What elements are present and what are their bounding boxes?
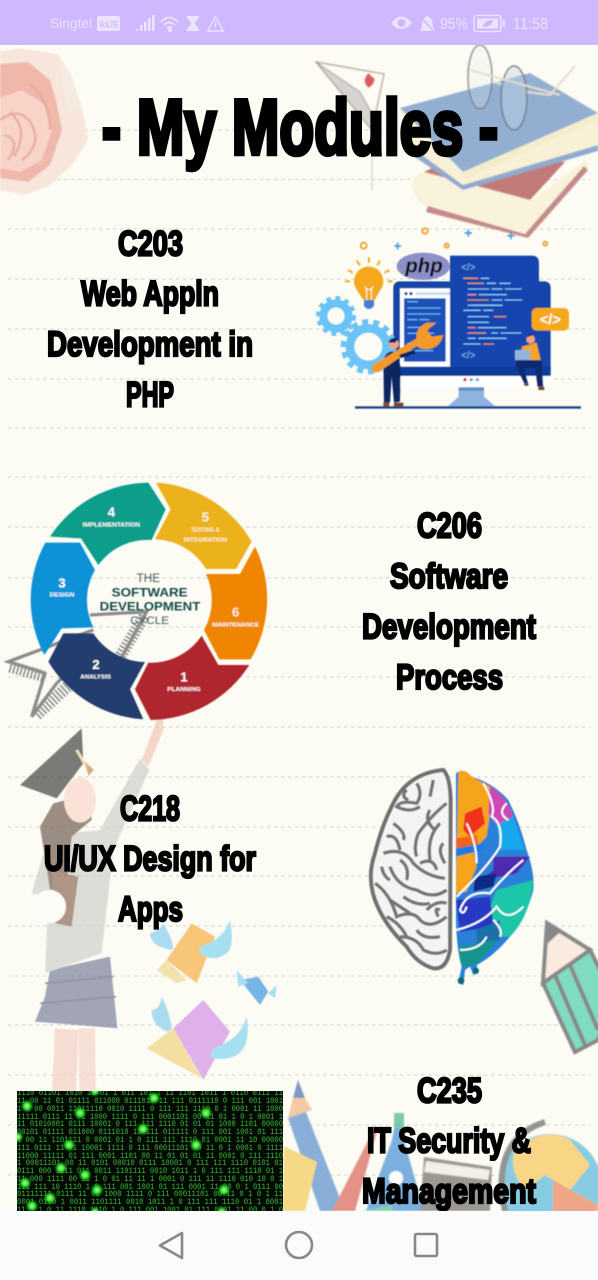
- segment 1 planning: [135, 636, 249, 720]
- heading: C218: Apps: [118, 890, 183, 929]
- icon: battery: [474, 16, 505, 32]
- decoration: sketched arrow behind cycle: [8, 612, 147, 717]
- heading: C203: PHP: [126, 376, 174, 414]
- segment labels: PLANNING: [167, 687, 201, 693]
- woman with laptop: [515, 334, 544, 390]
- heading: C235: IT Security &: [367, 1122, 531, 1160]
- image: green binary matrix: 1 0 00 0011 11011110 0010 1111 0 111 111 1110 0 1 0001 11 1000: [17, 1104, 283, 1114]
- cycle centre title: THE: [137, 572, 160, 585]
- cycle centre title: [100, 572, 201, 627]
- heading: C206: [362, 506, 536, 697]
- image: green binary matrix: 0001 0110 1 0011 1101111 0010 1011 1 0 111 111 1110 01 1 0001: [17, 1197, 283, 1207]
- battery percent: 95%: [440, 16, 468, 33]
- brain right hemisphere: [456, 771, 534, 985]
- segment labels: TESTING &: [191, 527, 220, 533]
- heading: C206: C206: [417, 506, 482, 546]
- editor window: [400, 288, 452, 367]
- brain left hemisphere: [371, 770, 451, 968]
- cycle centre title: DEVELOPMENT: [100, 600, 201, 614]
- segment 4 implementation: [50, 483, 166, 565]
- image: green binary matrix: 111 111 10 1110 1 0 111 001 1001 01 111 0001 11 00 0 1 0111 00: [17, 1182, 283, 1192]
- icon: home: [286, 1232, 312, 1258]
- cycle centre title: CYCLE: [130, 615, 169, 627]
- carrier name: Singtel: [50, 16, 92, 31]
- icon: hourglass: [187, 16, 199, 31]
- decoration: paper plane: [316, 62, 384, 190]
- icon: signal bars: [136, 15, 154, 31]
- sparkles: [361, 228, 547, 249]
- segment 2 analysis: [48, 633, 145, 719]
- segment labels: MAINTENANCE: [212, 623, 259, 629]
- man with wrench: [371, 323, 443, 407]
- clock: 11:58: [513, 16, 548, 33]
- heading: C235: C235: [417, 1072, 482, 1110]
- icon: eye: [391, 16, 412, 29]
- icon: VoLTE: [97, 16, 120, 31]
- segment 5 testing and integration: [155, 483, 252, 569]
- heading: C218: [44, 790, 256, 929]
- cycle centre title: SOFTWARE: [112, 586, 188, 600]
- heading: C206: Process: [396, 658, 503, 697]
- image: green binary matrix: 11111 0111 11 01 1000 1111 0 111 0001101 00 11 01 1 0 1 0001 1: [17, 1112, 283, 1122]
- image: green binary matrix: 0111 000 1111 011 0011 1101111 0010 1011 1 0 111 111 1110 01 1: [17, 1166, 283, 1176]
- image: green binary matrix: 11 01010001 0111 10001 0 111 111 1110 01 01 01 1000 1101 00000: [17, 1119, 283, 1129]
- image: green binary matrix: 01111111 0111 11 01 1000 1111 0 111 00011101 00 11 0 1 0 1 11: [17, 1189, 283, 1199]
- illustration: brain: [371, 770, 534, 985]
- image: green binary matrix: 11 000 1111 00 11 1 0 01 11 11 1 0001 0 111 11 1110 010 10 0 1: [17, 1174, 283, 1184]
- code panel: [450, 256, 539, 367]
- navigation bar: [0, 1211, 598, 1280]
- heading: C203: Development in: [47, 325, 253, 364]
- icon: recents: [415, 1234, 437, 1256]
- segment labels: INTEGRATION: [184, 537, 227, 543]
- monitor: [355, 281, 581, 409]
- image: green binary matrix: 1 00 11 1101111 0 0001 01 1 0 111 111 1110 01 0001 11 10 00000: [17, 1135, 283, 1145]
- gears: [319, 299, 393, 371]
- segment labels: ANALYSIS: [80, 674, 112, 680]
- code panel: </>: [461, 351, 476, 362]
- heading: C218: C218: [120, 790, 180, 828]
- icon: VoLTE: VoLTE: [99, 20, 118, 30]
- segment labels: 2: [92, 657, 100, 672]
- php logo: [397, 253, 450, 280]
- segment 3 design: [31, 543, 95, 655]
- icon: back: [160, 1233, 182, 1258]
- status bar: [0, 0, 598, 45]
- code bubble: [532, 308, 569, 331]
- image: green binary matrix: 11 1 1 0 11 1110 1110 1 0 111 001 1001 01 111 0001 11 00 0 1 0: [17, 1205, 283, 1215]
- image: green binary matrix: 11 00 11 01 01111 011000 0111010 11 111 0111110 0 111 001 1001: [17, 1096, 283, 1106]
- plus marks: [394, 229, 515, 249]
- heading: C235: Management: [362, 1172, 536, 1211]
- code bubble: </>: [540, 313, 561, 329]
- segment labels: [50, 505, 259, 693]
- heading: C206: Software: [390, 557, 508, 596]
- icon: muted bell: [420, 16, 435, 33]
- decoration: graduate girl: [20, 718, 164, 1091]
- segment labels: 6: [232, 604, 239, 619]
- heading: C218: UI/UX Design for: [44, 840, 256, 878]
- icon: warning: [208, 17, 224, 31]
- decoration: flying books: [147, 920, 277, 1080]
- segment 6 maintenance: [204, 547, 267, 659]
- segment labels: 4: [108, 505, 116, 520]
- decoration: stacked books and glasses: [400, 45, 598, 238]
- illustration: PHP web development: [319, 228, 581, 409]
- decoration: school supplies: [283, 1080, 598, 1211]
- segment labels: 5: [202, 510, 210, 525]
- light bulb: [345, 257, 393, 309]
- image: green binary matrix: [17, 1091, 283, 1211]
- decoration: rose: [0, 48, 88, 195]
- image: green binary matrix: 1 00011101 00 11 0101 00010 0111 10001 0 111 111 1110 0101 01: [17, 1158, 283, 1168]
- segment labels: 3: [58, 575, 66, 590]
- php logo: php: [404, 254, 443, 277]
- image: green binary matrix: 1110 01101 1010 11 01 1 011 101 1 11 1101 1011 1 0110 0111 11: [17, 1088, 283, 1098]
- segment labels: 1: [180, 670, 188, 685]
- chart: software development cycle: [31, 483, 267, 720]
- heading: C206: Development: [362, 608, 536, 646]
- heading: C203: [47, 224, 253, 414]
- code panel: </>: [461, 263, 476, 274]
- image: green binary matrix: 11000 11111 01 111 0001 1101 00 11 01 01 01 11 0001 0 111 1110: [17, 1151, 283, 1161]
- heading: C235: [362, 1072, 536, 1211]
- heading: C203: Web Appln: [81, 274, 219, 314]
- segment labels: DESIGN: [50, 592, 74, 598]
- image: green binary matrix: 111 0111 11 01 10001 1111 0 111 00011101 00 11 0 1 0001 0 1111: [17, 1143, 283, 1153]
- icon: wifi: [161, 18, 178, 31]
- heading: C203: C203: [118, 224, 183, 264]
- image: green binary matrix: 00101 01111 011000 0111010 11 111 011111 0 111 001 1001 01 111: [17, 1127, 283, 1137]
- decoration: green pencil: [543, 923, 598, 1052]
- segment labels: IMPLEMENTATION: [83, 522, 140, 528]
